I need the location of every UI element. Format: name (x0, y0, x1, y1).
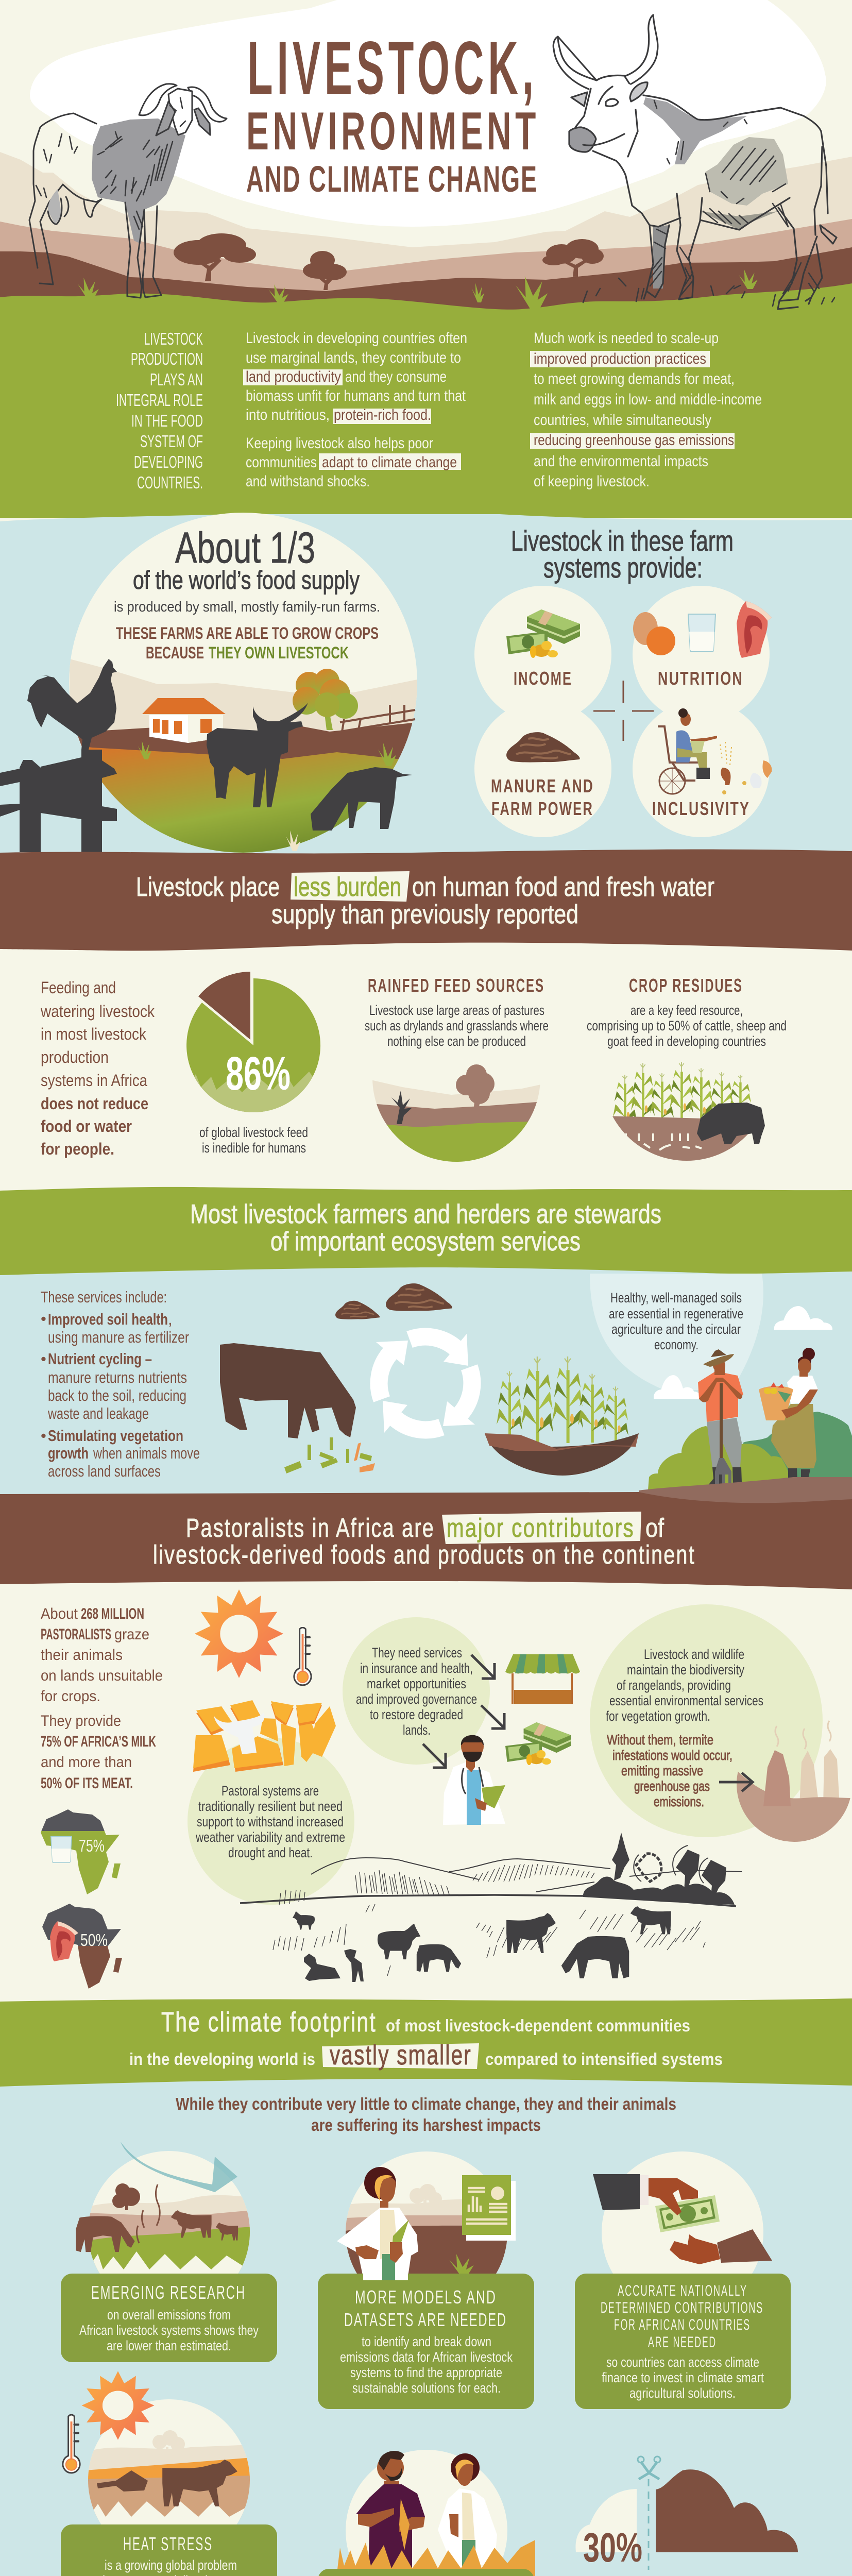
title: LIVESTOCK, (247, 26, 538, 110)
farmers (698, 1348, 818, 1493)
highlight box (291, 871, 410, 902)
benefit labels: INCOME (514, 668, 572, 689)
intro right column: milk and eggs in low- and middle-income (534, 391, 762, 408)
icon: woman in wheelchair feeding chickens (658, 708, 772, 794)
mountain layers (0, 152, 852, 330)
services list: Nutrient cycling – (48, 1350, 152, 1368)
subheading: While they contribute very little to climate change, they and their animals (176, 2094, 676, 2113)
band heading (153, 1513, 695, 1569)
intro right column: reducing greenhouse gas emissions (534, 432, 734, 449)
bubble: services (343, 1617, 490, 1765)
panel: farm systems (0, 513, 852, 860)
card: more models (318, 2273, 534, 2409)
band heading (190, 1199, 661, 1257)
illustration: models and datasets (337, 2151, 516, 2274)
pastoralists statistics text: their animals (41, 1647, 123, 1664)
benefits heading: systems provide: (543, 551, 703, 584)
icon: thermometer (294, 1628, 311, 1685)
icon: recycle arrows (376, 1334, 475, 1433)
icon: cracked earth with skull (193, 1700, 336, 1772)
panel: ecosystem services (0, 1187, 852, 1510)
cross divider (593, 681, 654, 741)
icon: dead tree (391, 1091, 412, 1124)
band heading: vastly smaller (330, 2040, 472, 2071)
left text: Feeding and (41, 978, 116, 997)
sky blob (30, 0, 826, 227)
illustration: finance (593, 2151, 772, 2313)
rainfed feed sources: Livestock use large areas of pastures (369, 1003, 544, 1018)
grass band (0, 283, 852, 518)
card: adaptation innovations (318, 2569, 534, 2576)
subheading (176, 2094, 676, 2134)
about one third text: THESE FARMS ARE ABLE TO GROW CROPS (116, 624, 379, 642)
benefits heading (511, 524, 734, 584)
wheat field (337, 2540, 535, 2576)
bubble: services: and improved governance (356, 1691, 477, 1707)
left text: for people. (41, 1140, 114, 1158)
card: emerging research: African livestock systems shows they (79, 2323, 259, 2338)
bubble: biodiversity: maintain the biodiversity (627, 1662, 744, 1677)
intro middle column: land productivity (246, 368, 341, 385)
farmhouse (142, 698, 226, 743)
band heading: of (645, 1513, 664, 1543)
trees and scrub silhouettes (583, 1833, 735, 1905)
cow (553, 15, 837, 309)
fence silhouette (0, 750, 117, 852)
blue background (0, 1257, 852, 1510)
small tuft (138, 741, 396, 851)
woman (438, 2453, 497, 2568)
fence (340, 705, 415, 732)
icon: milk glass (688, 614, 715, 652)
card: more models: DATASETS ARE NEEDED (344, 2309, 507, 2330)
title (246, 26, 540, 200)
title: AND CLIMATE CHANGE (246, 159, 538, 200)
icon: eggs (633, 612, 675, 655)
bubble: pastoral systems: weather variability and extreme (195, 1829, 345, 1845)
icon: termite mounds (737, 1721, 852, 1844)
intro right column: Much work is needed to scale-up (534, 330, 719, 347)
band heading: of important ecosystem services (270, 1227, 581, 1257)
bubble: biodiversity: emissions. (654, 1794, 704, 1809)
pastoralists statistics text: 268 MILLION (81, 1605, 144, 1622)
intro heading (116, 329, 203, 492)
band heading: Pastoralists in Africa are (186, 1513, 435, 1543)
intro heading: PRODUCTION (131, 349, 203, 368)
arrows to services (423, 1655, 504, 1768)
teal arrow (121, 2142, 237, 2192)
sketch landscape (240, 1858, 742, 1976)
bubble: biodiversity: of rangelands, providing (617, 1677, 731, 1693)
icon: grazing cow (220, 1343, 356, 1438)
icon: manure piles (335, 1283, 452, 1319)
bubble: pastoral systems: Pastoral systems are (221, 1783, 319, 1799)
pastoralists statistics text: 50% OF ITS MEAT. (41, 1775, 133, 1792)
illustration: heat stress (62, 2371, 250, 2524)
icon: money (505, 1722, 571, 1765)
blue background (0, 514, 852, 858)
title: ENVIRONMENT (246, 101, 540, 161)
callout bubble: agriculture and the circular (611, 1321, 741, 1337)
intro right column: countries, while simultaneously (534, 412, 711, 429)
banner heading: on human food and fresh water (412, 872, 714, 902)
panel: pastoralists banner (0, 1492, 852, 1589)
bubble: pastoral systems (188, 1738, 354, 1905)
panel: less burden banner (0, 850, 852, 951)
band heading: Most livestock farmers and herders are stewards (190, 1199, 661, 1229)
card: more models: to identify and break down (362, 2334, 491, 2349)
intro middle column: Livestock in developing countries often (246, 330, 467, 347)
orange-green tree (293, 669, 358, 730)
highlight box (322, 2043, 479, 2069)
intro middle column: into nutritious, (246, 406, 330, 423)
about one third text: THEY OWN LIVESTOCK (209, 643, 349, 662)
intro heading: SYSTEM OF (140, 432, 203, 451)
callout bubble: Healthy, well-managed soils (610, 1290, 742, 1306)
panel: feed (40, 972, 787, 1164)
card: heat stress: HEAT STRESS (123, 2533, 213, 2554)
icon: cut emissions cloud (575, 2456, 798, 2570)
clouds (654, 1306, 832, 1399)
crop residues: are a key feed resource, (631, 1003, 743, 1018)
card: national contributions: FOR AFRICAN COUNTRIES (614, 2316, 751, 2333)
benefit labels (491, 668, 750, 819)
band heading: The climate footprint (161, 2007, 377, 2038)
pastoralists statistics text: and more than (41, 1754, 132, 1771)
grass tufts (78, 269, 758, 309)
bubble: biodiversity: essential environmental services (609, 1693, 763, 1708)
card: heat stress: is a growing global problem (105, 2557, 237, 2573)
callout bubble: economy. (654, 1337, 698, 1352)
card: more models: sustainable solutions for each. (352, 2380, 501, 2396)
bubble: services: to restore degraded (370, 1707, 463, 1722)
icon: meat (737, 601, 772, 658)
bubble: services: lands. (403, 1722, 431, 1738)
card: national contributions: agricultural solutions. (629, 2385, 736, 2401)
services list: across land surfaces (48, 1462, 161, 1480)
services list: when animals move (93, 1444, 200, 1462)
bushes (648, 1412, 852, 1492)
benefit labels: NUTRITION (658, 668, 743, 689)
icon: grazing animal (697, 1103, 765, 1144)
pie chart 86%: 86% (226, 1047, 291, 1100)
card: national contributions (575, 2274, 791, 2409)
left text: watering livestock (40, 1002, 155, 1021)
intro right column: and the environmental impacts (534, 453, 708, 470)
card: national contributions: ACCURATE NATIONALLY (618, 2282, 747, 2299)
intro right column: to meet growing demands for meat, (534, 370, 735, 387)
bubble: biodiversity: for vegetation growth. (606, 1708, 710, 1724)
card: emerging research (61, 2274, 277, 2362)
grazing cow silhouette (311, 767, 412, 831)
services list: manure returns nutrients (48, 1368, 187, 1386)
left text: systems in Africa (41, 1071, 147, 1090)
services list: , (168, 1310, 173, 1328)
man farmer (698, 1349, 748, 1493)
arrow to mound (719, 1773, 753, 1791)
intro heading: DEVELOPING (134, 452, 203, 471)
services list: back to the soil, reducing (48, 1386, 186, 1404)
intro middle column: use marginal lands, they contribute to (246, 349, 461, 366)
intro heading: INTEGRAL ROLE (116, 391, 203, 410)
wheat stalk (399, 2499, 410, 2550)
green band (0, 1998, 852, 2087)
services list (41, 1288, 200, 1480)
panel: pastoralists content (41, 1589, 852, 1989)
about one third text: is produced by small, mostly family-run farms. (114, 599, 380, 615)
pastoralists statistics text: graze (114, 1626, 149, 1643)
rainfed feed sources: such as drylands and grasslands where (365, 1018, 549, 1033)
intro middle column: and they consume (345, 368, 447, 385)
intro middle column: Keeping livestock also helps poor (246, 435, 433, 452)
pastoralists statistics text: About (41, 1605, 78, 1622)
benefit labels: FARM POWER (491, 798, 593, 819)
brown band (0, 850, 852, 951)
card: emerging research: EMERGING RESEARCH (91, 2282, 246, 2303)
left text: in most livestock (41, 1025, 147, 1043)
services list: • (41, 1350, 46, 1368)
bubble: services: market opportunities (367, 1676, 466, 1691)
illustration: adaptation innovations (337, 2450, 535, 2576)
illustration: emerging research (76, 2142, 250, 2274)
benefit labels: INCLUSIVITY (652, 798, 750, 819)
map: Africa milk 75%: 75% (79, 1836, 105, 1855)
crop residues: CROP RESIDUES (629, 975, 743, 996)
band heading: livestock-derived foods and products on the continent (153, 1540, 695, 1569)
pastoralists statistics text: 75% OF AFRICA’S MILK (41, 1733, 156, 1750)
pastoralists statistics text: They provide (41, 1713, 121, 1730)
intro middle column: biomass unfit for humans and turn that (246, 387, 466, 404)
pie chart 86% (185, 972, 325, 1118)
band heading (129, 2007, 723, 2071)
callout bubble (590, 1274, 763, 1390)
left text: does not reduce (41, 1094, 148, 1113)
woman farmer with basket (759, 1348, 818, 1490)
zebu cow silhouette (207, 703, 308, 807)
goat (29, 84, 227, 298)
pastoralists statistics text: on lands unsuitable (41, 1667, 163, 1684)
crop residues (587, 975, 787, 1164)
icon: tree (456, 1064, 495, 1107)
intro heading: COUNTRIES. (137, 473, 203, 492)
band heading: in the developing world is (129, 2049, 315, 2069)
intro middle column (243, 330, 467, 490)
bubble: pastoral systems: traditionally resilient but need (198, 1799, 343, 1814)
blue background (0, 2071, 852, 2576)
about one third text (114, 523, 380, 662)
card: more models: MORE MODELS AND (355, 2286, 497, 2308)
bubble: services: in insurance and health, (360, 1660, 473, 1676)
icon: woman researcher (337, 2167, 418, 2280)
subheading: are suffering its harshest impacts (311, 2115, 541, 2134)
left text: food or water (41, 1117, 132, 1136)
intro right column (530, 330, 762, 490)
left text: production (41, 1048, 109, 1066)
left text (40, 978, 155, 1158)
band heading: compared to intensified systems (485, 2049, 723, 2069)
card: emerging research: are lower than estimated. (107, 2338, 231, 2353)
map: Africa meat 50% (42, 1904, 122, 1989)
pastoralists statistics text (41, 1605, 163, 1792)
card: more models: emissions data for African livestock (340, 2349, 513, 2365)
rooster silhouette (27, 659, 117, 750)
trees (174, 233, 604, 290)
services list: Improved soil health (48, 1310, 168, 1328)
icon: corn in soil bowl (485, 1357, 639, 1476)
egg scene (0, 513, 422, 860)
icon: sun (195, 1589, 283, 1678)
card: national contributions: so countries can access climate (606, 2354, 759, 2370)
banner heading: less burden (294, 872, 401, 902)
intro right column: improved production practices (534, 350, 706, 367)
services list: • (41, 1427, 46, 1445)
benefit labels: MANURE AND (491, 775, 594, 796)
intro middle column: adapt to climate change (322, 454, 457, 471)
services list: • (41, 1310, 46, 1328)
rainfed feed sources (365, 975, 549, 1164)
icon: chopped crop residues (284, 1437, 372, 1473)
brown band (0, 1492, 852, 1589)
bubble: services: They need services (372, 1645, 462, 1660)
intro right column: of keeping livestock. (534, 473, 650, 490)
band heading: of most livestock-dependent communities (386, 2016, 690, 2035)
bubble: biodiversity: Livestock and wildlife (644, 1647, 744, 1662)
pastoralists statistics text: for crops. (41, 1688, 100, 1705)
card: national contributions: finance to invest in climate smart (602, 2370, 764, 2385)
services list: growth (48, 1444, 89, 1462)
services list: These services include: (41, 1288, 167, 1306)
animal silhouettes (293, 1906, 671, 1982)
panel: climate footprint banner (0, 1998, 852, 2576)
green band (0, 1187, 852, 1275)
icon: cut emissions cloud: 30% (583, 2524, 642, 2570)
icon: money (506, 609, 580, 658)
pie caption: of global livestock feed (199, 1125, 308, 1140)
bubble: biodiversity: Without them, termite (607, 1732, 713, 1748)
map: Africa milk 75% (41, 1809, 121, 1894)
icon: manure (506, 732, 580, 762)
callout bubble: are essential in regenerative (609, 1306, 743, 1321)
highlight box (442, 1512, 641, 1544)
intro heading: LIVESTOCK (144, 329, 203, 348)
icon: doctor (443, 1735, 505, 1825)
intro heading: PLAYS AN (150, 370, 203, 389)
ground (639, 1477, 852, 1507)
crop residues: comprising up to 50% of cattle, sheep and (587, 1018, 787, 1033)
services list: using manure as fertilizer (48, 1328, 189, 1346)
pie caption (199, 1125, 308, 1156)
card: national contributions: ARE NEEDED (648, 2334, 717, 2351)
card: emerging research: on overall emissions from (107, 2307, 231, 2323)
bubble: pastoral systems: support to withstand increased (197, 1814, 344, 1829)
man (356, 2451, 425, 2568)
rainfed feed sources: RAINFED FEED SOURCES (368, 975, 544, 996)
pie caption: is inedible for humans (202, 1140, 306, 1156)
about one third text: About 1/3 (175, 523, 315, 572)
about one third text: BECAUSE (146, 643, 204, 662)
banner heading: Livestock place (136, 872, 280, 902)
banner heading (136, 872, 714, 929)
banner heading: supply than previously reported (271, 900, 578, 929)
icon: data report (462, 2175, 516, 2241)
card: more models: systems to find the appropriate (350, 2365, 502, 2380)
pastoralists statistics text: PASTORALISTS (41, 1626, 111, 1643)
about one third text: of the world’s food supply (133, 566, 360, 595)
bubble: biodiversity: greenhouse gas (634, 1778, 710, 1794)
rainfed feed sources: nothing else can be produced (387, 1033, 526, 1049)
map: Africa meat 50%: 50% (80, 1930, 108, 1950)
services list: waste and leakage (47, 1404, 149, 1422)
panel: hero (0, 0, 852, 518)
bubble: biodiversity: emitting massive (621, 1763, 703, 1778)
intro middle column: and withstand shocks. (246, 473, 370, 490)
bubble: pastoral systems: drought and heat. (228, 1845, 313, 1860)
bubble: biodiversity (590, 1604, 823, 1837)
icon: market stall (505, 1654, 580, 1704)
intro middle column: protein-rich food. (334, 406, 431, 423)
bubble: biodiversity: infestations would occur, (612, 1748, 732, 1763)
card: heat stress (61, 2524, 277, 2576)
benefits heading: Livestock in these farm (511, 524, 734, 557)
intro heading: IN THE FOOD (131, 411, 203, 430)
services list: Stimulating vegetation (48, 1427, 183, 1445)
intro middle column: communities (246, 454, 317, 471)
crop residues: goat feed in developing countries (607, 1033, 766, 1049)
panel: impacts (61, 2094, 798, 2576)
band heading: major contributors (447, 1513, 635, 1543)
benefit circles (474, 586, 770, 837)
